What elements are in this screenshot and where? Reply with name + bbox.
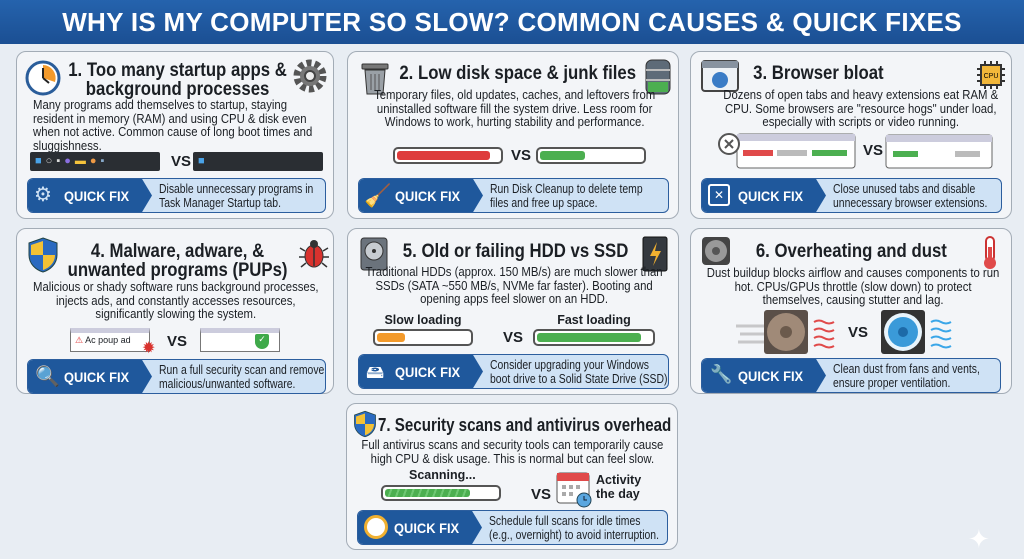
speed bars: Slow loading bbox=[384, 313, 462, 327]
heading bbox=[68, 59, 287, 100]
scanning comparison: VS bbox=[531, 486, 551, 503]
icon: sparkle: ✦ bbox=[968, 524, 990, 554]
panel: malware bbox=[16, 228, 334, 394]
icon: CPU chip bbox=[977, 61, 1005, 89]
icon: shield bbox=[354, 410, 376, 438]
browser comparison: VS bbox=[863, 142, 883, 159]
quick fix bbox=[358, 178, 669, 213]
quick fix: 🔍 bbox=[35, 366, 60, 388]
scanning comparison: the day bbox=[596, 487, 640, 501]
text: Full antivirus scans and security tools can temporarily cause high CPU & disk usage. This is normal but can feel slow. bbox=[361, 437, 663, 466]
quick fix: QUICK FIX bbox=[394, 520, 459, 536]
icon: database bbox=[646, 60, 670, 94]
quick fix: QUICK FIX bbox=[738, 188, 803, 204]
scanning comparison: Scanning... bbox=[409, 468, 476, 482]
icon: trash can bbox=[362, 64, 388, 94]
title: WHY IS MY COMPUTER SO SLOW? COMMON CAUSES & QUICK FIXES bbox=[62, 7, 962, 37]
icon: CPU chip: CPU bbox=[984, 73, 998, 80]
icon: fan bbox=[702, 237, 730, 265]
quick fix: QUICK FIX bbox=[64, 369, 129, 385]
speed bars: VS bbox=[503, 329, 523, 346]
malware comparison: ✹ bbox=[142, 340, 155, 357]
fan comparison: VS bbox=[848, 324, 868, 341]
quick fix: 🖴 bbox=[366, 362, 384, 382]
malware comparison: VS bbox=[167, 333, 187, 350]
text: Many programs add themselves to startup, staying resident in memory (RAM) and using CPU & disk even when not active. Common cause of long boot times and sluggishness. bbox=[33, 97, 312, 152]
icon: SSD bbox=[642, 236, 668, 272]
quick fix: boot drive to a Solid State Drive (SSD). bbox=[490, 370, 669, 386]
disk bars: VS bbox=[511, 147, 531, 164]
quick fix: QUICK FIX bbox=[395, 188, 460, 204]
quick fix: Consider upgrading your Windows bbox=[490, 357, 649, 372]
heading: 3. Browser bloat bbox=[753, 62, 884, 84]
quick fix: Run Disk Cleanup to delete temp bbox=[490, 181, 643, 196]
quick fix: QUICK FIX bbox=[395, 364, 460, 380]
text: Traditional HDDs (approx. 150 MB/s) are much slower than SSDs (SATA ~550 MB/s, NVMe far faster). Booting and opening apps feel slower on an HDD. bbox=[366, 264, 663, 306]
quick fix: QUICK FIX bbox=[738, 368, 803, 384]
quick fix: (e.g., overnight) to avoid interruption. bbox=[489, 526, 659, 542]
quick fix: ensure proper ventilation. bbox=[833, 374, 950, 390]
scanning comparison: Activity bbox=[596, 473, 641, 487]
panel: HDD vs SSD bbox=[347, 228, 679, 395]
icon: bug bbox=[299, 240, 329, 268]
heading: 4. Malware, adware, & bbox=[91, 240, 264, 262]
text: Temporary files, old updates, caches, and leftovers from uninstalled software fill the system drive. Less room for Windows to work, hurting stability and performance. bbox=[374, 87, 655, 129]
icon: gear bbox=[294, 60, 326, 92]
quick fix bbox=[27, 359, 326, 394]
speed bars bbox=[373, 313, 655, 346]
quick fix: Schedule full scans for idle times bbox=[489, 513, 640, 528]
quick fix: Close unused tabs and disable bbox=[833, 181, 975, 196]
quick fix bbox=[27, 178, 326, 213]
quick fix: unnecessary browser extensions. bbox=[833, 194, 987, 210]
panel: overheating bbox=[690, 228, 1012, 394]
quick fix: Clean dust from fans and vents, bbox=[833, 361, 980, 376]
taskbar comparison: ■○▪●▬●▪ bbox=[35, 155, 108, 167]
quick fix bbox=[358, 354, 669, 389]
panel: browser bloat bbox=[690, 51, 1012, 219]
browser comparison bbox=[718, 133, 992, 168]
taskbar comparison: ■ bbox=[198, 155, 205, 167]
quick fix: ✕ bbox=[714, 188, 724, 202]
quick fix: Disable unnecessary programs in bbox=[159, 181, 313, 196]
quick fix: 🔧 bbox=[710, 364, 732, 384]
text: Dust buildup blocks airflow and causes components to run hot. CPUs/GPUs throttle (slow down) to protect themselves, causing stutter and lag. bbox=[707, 265, 999, 307]
icon: browser bbox=[701, 60, 739, 92]
heading: 2. Low disk space & junk files bbox=[399, 62, 636, 84]
taskbar comparison bbox=[30, 152, 323, 171]
quick fix bbox=[701, 358, 1001, 393]
panel: startup apps bbox=[16, 51, 334, 219]
heading: 7. Security scans and antivirus overhead bbox=[378, 415, 671, 435]
malware comparison: ⚠ Ac poup ad bbox=[75, 335, 131, 345]
quick fix: files and free up space. bbox=[490, 194, 598, 210]
heading: unwanted programs (PUPs) bbox=[68, 259, 287, 281]
quick fix: QUICK FIX bbox=[64, 188, 129, 204]
quick fix: malicious/unwanted software. bbox=[159, 376, 295, 390]
malware comparison: ✓ bbox=[258, 334, 266, 344]
heading: 5. Old or failing HDD vs SSD bbox=[403, 240, 628, 262]
scanning comparison bbox=[381, 468, 642, 508]
panel: security scans bbox=[346, 403, 678, 550]
quick fix: Task Manager Startup tab. bbox=[159, 194, 281, 210]
heading: background processes bbox=[86, 78, 269, 100]
quick fix: Run a full security scan and remove bbox=[159, 362, 324, 377]
icon: clock bbox=[26, 60, 60, 96]
quick fix bbox=[357, 510, 668, 545]
heading: 6. Overheating and dust bbox=[756, 240, 947, 262]
speed bars: Fast loading bbox=[557, 313, 631, 327]
text: Malicious or shady software runs background processes, injects ads, and constantly accesses resources, significantly slowing the system. bbox=[33, 279, 319, 321]
icon: HDD bbox=[360, 238, 388, 270]
icon: thermometer bbox=[984, 236, 996, 269]
text: Dozens of open tabs and heavy extensions eat RAM & CPU. Some browsers are "resource hogs" under load, especially with scripts or video running. bbox=[723, 87, 998, 129]
malware comparison bbox=[70, 328, 280, 357]
panel: disk space bbox=[347, 51, 679, 219]
heading: 1. Too many startup apps & bbox=[68, 59, 287, 81]
taskbar comparison: VS bbox=[171, 153, 191, 170]
quick fix: ⚙ bbox=[34, 184, 52, 206]
quick fix bbox=[701, 178, 1002, 213]
heading bbox=[68, 240, 287, 281]
fan comparison bbox=[736, 310, 952, 354]
title bbox=[0, 0, 1024, 44]
icon: shield bbox=[28, 238, 58, 272]
quick fix: 🧹 bbox=[364, 183, 391, 208]
disk bars bbox=[393, 147, 646, 164]
